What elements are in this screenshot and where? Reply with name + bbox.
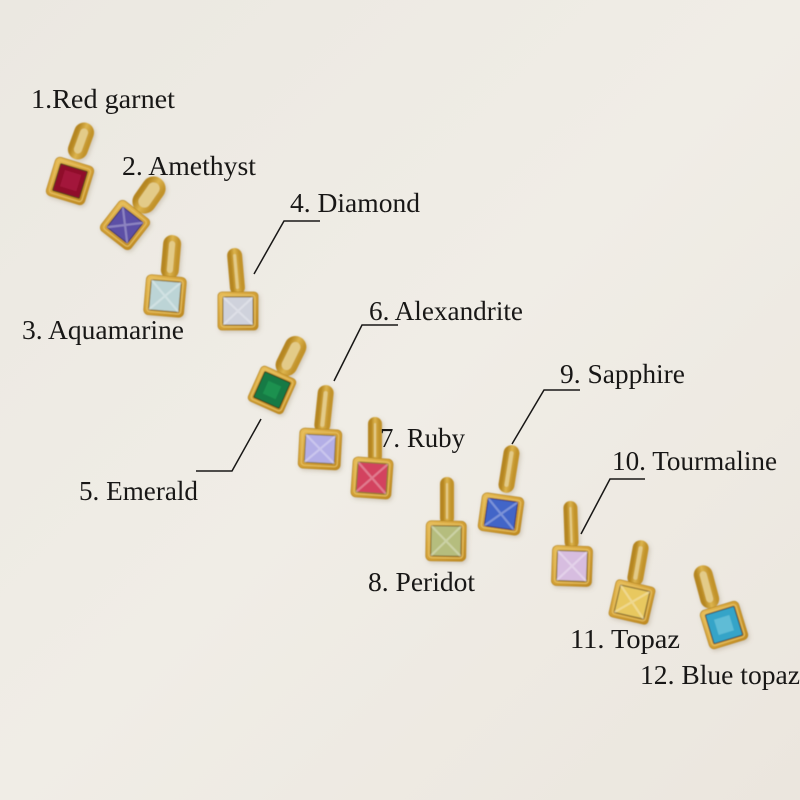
- pendant 11: topaz: [608, 542, 656, 625]
- label 7: 7. Ruby: [380, 423, 465, 453]
- label 3: 3. Aquamarine: [22, 315, 184, 345]
- label 5: 5. Emerald: [79, 476, 198, 506]
- label 4: 4. Diamond: [290, 188, 420, 218]
- leader line 5: [196, 419, 261, 471]
- label 9: 9. Sapphire: [560, 359, 685, 389]
- pendant 4: diamond: [218, 251, 258, 330]
- pendant 5: emerald: [247, 336, 306, 415]
- label 10: 10. Tourmaline: [612, 446, 777, 476]
- pendant 1: red garnet: [45, 124, 95, 206]
- leader line 6: [334, 325, 398, 381]
- leader line 10: [581, 479, 645, 534]
- label 2: 2. Amethyst: [122, 151, 257, 181]
- label 6: 6. Alexandrite: [369, 296, 523, 326]
- label 11: 11. Topaz: [570, 624, 680, 654]
- pendant 7: ruby: [351, 420, 393, 499]
- pendant 12: blue topaz: [695, 567, 749, 650]
- pendant 10: tourmaline: [551, 504, 593, 587]
- label 12: 12. Blue topaz: [640, 660, 800, 690]
- pendant 2: amethyst: [98, 176, 166, 252]
- label 1: 1.Red garnet: [31, 84, 176, 114]
- pendant 6: alexandrite: [298, 388, 342, 470]
- leader line 9: [512, 390, 580, 444]
- pendant 9: sapphire: [478, 447, 524, 536]
- pendant 3: aquamarine: [143, 238, 187, 318]
- label 8: 8. Peridot: [368, 567, 476, 597]
- leader line 4: [254, 221, 320, 274]
- pendant 8: peridot: [426, 480, 466, 561]
